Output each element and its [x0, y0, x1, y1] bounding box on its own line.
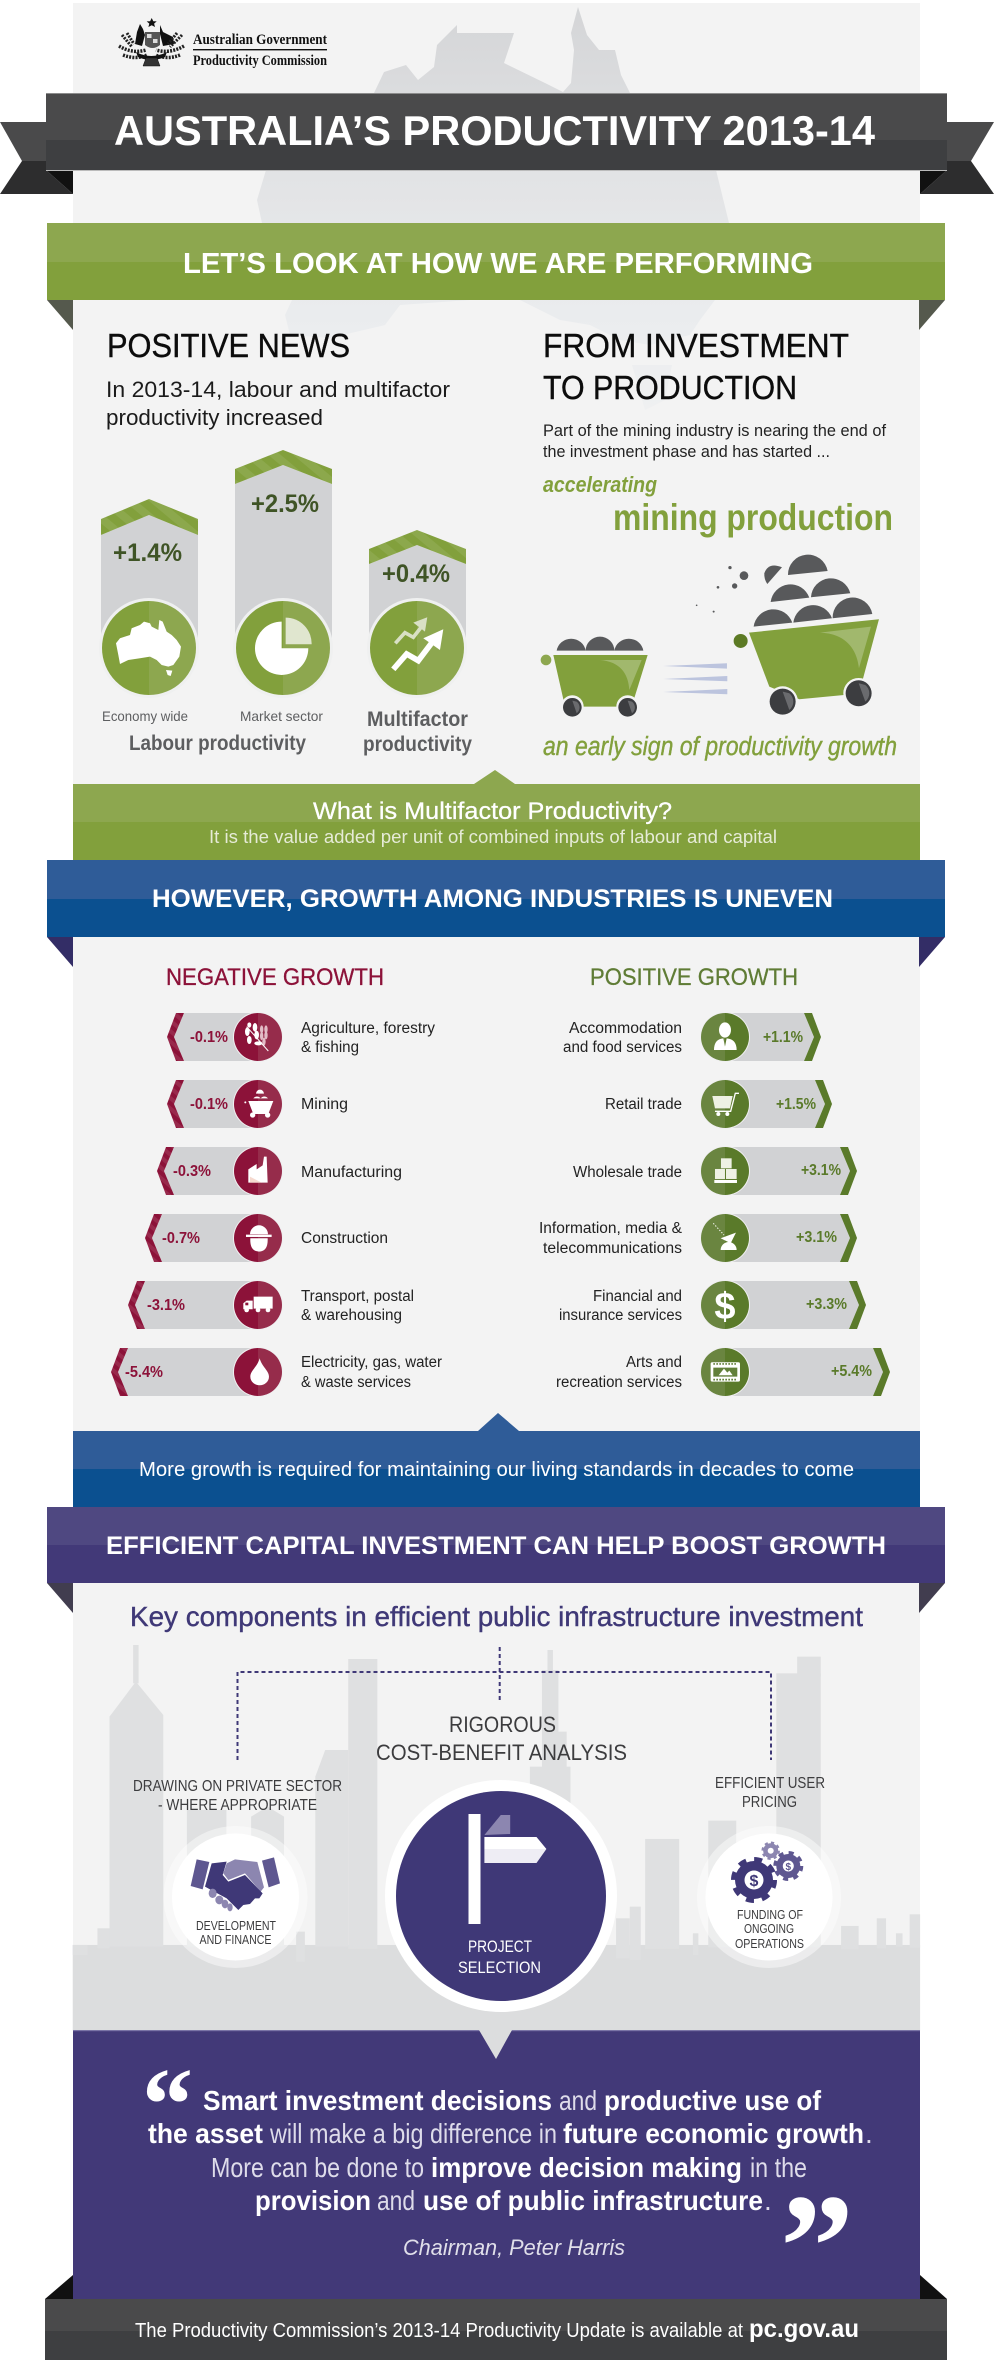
title ribbon: [0, 93, 994, 194]
panel: negative growth: [111, 964, 442, 1397]
icon: pie chart: [255, 618, 312, 675]
callout: more growth required: [73, 1413, 920, 1507]
row: retail: +1.5%: [776, 1096, 816, 1113]
circle: development and finance: DEVELOPMENT: [196, 1919, 276, 1933]
quote text: and: [559, 2085, 597, 2116]
row: construction: -0.7%: [162, 1230, 200, 1247]
early sign label: an early sign of productivity growth: [543, 733, 897, 761]
bar captions: Market sector: [240, 708, 323, 724]
quote text: Smart investment decisions: [203, 2085, 552, 2116]
panel: chairman quote: [73, 2030, 920, 2330]
text: drawing on private sector: - WHERE APPROPRIATE: [158, 1797, 317, 1814]
row: financial: +3.3%: [806, 1296, 847, 1313]
intro text: productivity increased: [106, 405, 323, 430]
text: drawing on private sector: DRAWING ON PRIVATE SECTOR: [133, 1778, 342, 1795]
icon: handshake: [191, 1857, 280, 1911]
row: agriculture: & fishing: [301, 1039, 359, 1056]
text: efficient user pricing: [715, 1775, 825, 1811]
callout: what is multifactor productivity: What is Multifactor Productivity?: [313, 798, 672, 825]
panel: from investment to production: [541, 327, 897, 761]
quote text: [148, 2085, 873, 2216]
quote text: the asset: [148, 2118, 263, 2149]
icon: shopping cart: [712, 1093, 739, 1116]
panel: positive news: [99, 327, 472, 756]
icon: dollar sign: $: [714, 1286, 736, 1328]
row: transport: -3.1%: [147, 1297, 185, 1314]
row: manufacturing: Manufacturing: [301, 1164, 402, 1181]
bar: multifactor +0.4%: +0.4%: [382, 560, 450, 588]
row: arts: recreation services: [556, 1374, 682, 1391]
icon: gears: [734, 1843, 801, 1900]
quote text: provision: [255, 2185, 371, 2216]
heading: from investment to production: TO PRODUCTION: [543, 369, 797, 406]
row: manufacturing: [157, 1146, 402, 1196]
heading: rigorous cost-benefit analysis: [376, 1712, 627, 1765]
row: transport: & warehousing: [301, 1307, 402, 1324]
bar captions: Labour productivity: [129, 732, 306, 755]
logo text: [193, 32, 328, 69]
row: financial: Financial and: [593, 1288, 682, 1305]
row: electricity: -5.4%: [125, 1364, 163, 1381]
quote text: productive use of: [604, 2085, 822, 2116]
footer ribbon: [45, 2275, 947, 2360]
bar: labour economy wide +1.4%: +1.4%: [113, 539, 182, 567]
icon: mining cart: [244, 1090, 273, 1118]
circle: project selection: PROJECT: [468, 1938, 532, 1956]
row: wholesale: +3.1%: [801, 1162, 841, 1179]
circle: development and finance: [164, 1826, 308, 1968]
icon: signpost: [468, 1814, 546, 1924]
quote text: use of public infrastructure: [423, 2185, 763, 2216]
row: information: telecommunications: [543, 1240, 682, 1257]
text: efficient user pricing: PRICING: [742, 1794, 797, 1811]
icon: closing quote mark: ”: [780, 2164, 854, 2330]
row: construction: [145, 1213, 388, 1263]
callout: what is multifactor productivity: It is the value added per unit of combined inputs of labour and capital: [209, 827, 777, 847]
row: wholesale: [573, 1146, 857, 1196]
section banner: uneven growth: [47, 860, 945, 967]
icon: coat of arms: [119, 18, 184, 66]
quote text: .: [865, 2118, 873, 2149]
row: transport: Transport, postal: [301, 1288, 414, 1305]
dashed connector lines: [238, 1647, 771, 1760]
banner heading: LET’S LOOK AT HOW WE ARE PERFORMING: [183, 248, 813, 280]
row: accommodation: +1.1%: [763, 1029, 803, 1046]
row: agriculture: Agriculture, forestry: [301, 1020, 435, 1037]
row: accommodation: and food services: [563, 1039, 682, 1056]
row: electricity: [111, 1347, 442, 1397]
heading: from investment to production: [543, 327, 849, 406]
bar captions: productivity: [363, 733, 472, 756]
row: agriculture: -0.1%: [190, 1029, 228, 1046]
quote text: future economic growth: [563, 2118, 864, 2149]
circle: funding of ongoing operations: [697, 1826, 841, 1968]
heading: rigorous cost-benefit analysis: COST-BENEFIT ANALYSIS: [376, 1740, 627, 1765]
investment text: [543, 422, 886, 461]
row: mining: [167, 1079, 348, 1129]
row: mining: -0.1%: [190, 1096, 228, 1113]
row: arts: [556, 1347, 890, 1397]
background skyline: [73, 1645, 920, 2031]
mining production label: mining production: [613, 497, 893, 538]
row: retail: [605, 1079, 832, 1129]
row: retail: Retail trade: [605, 1096, 682, 1113]
intro text: [106, 377, 450, 430]
accelerating label: accelerating: [543, 472, 657, 497]
footer link text: pc.gov.au: [749, 2315, 859, 2343]
row: information: [539, 1213, 857, 1263]
footer text: The Productivity Commission’s 2013-14 Productivity Update is available at: [135, 2320, 743, 2342]
section banner: performing: [47, 223, 945, 330]
row: transport: [128, 1280, 414, 1330]
large cart: [696, 555, 879, 717]
row: arts: Arts and: [626, 1354, 682, 1371]
quote attribution: Chairman, Peter Harris: [403, 2235, 625, 2260]
heading: from investment to production: FROM INVESTMENT: [543, 327, 849, 364]
quote text: in the: [750, 2152, 807, 2183]
bar: labour market sector +2.5%: +2.5%: [251, 490, 319, 518]
speed lines: [663, 663, 727, 694]
bar: multifactor +0.4%: [367, 530, 467, 698]
icon: factory: [248, 1157, 268, 1183]
circle: funding of ongoing operations: ONGOING: [744, 1922, 794, 1936]
investment text: Part of the mining industry is nearing the end of: [543, 422, 886, 440]
row: information: Information, media &: [539, 1220, 683, 1237]
bar: labour market sector +2.5%: [233, 450, 333, 698]
row: information: +3.1%: [796, 1229, 837, 1246]
circle: funding of ongoing operations: FUNDING OF: [737, 1908, 803, 1922]
investment text: the investment phase and has started ...: [543, 443, 830, 461]
icon: waiter: [714, 1022, 737, 1050]
ribbon tail left: [0, 122, 73, 194]
callout: more growth required: More growth is required for maintaining our living standards in decades to come: [139, 1459, 854, 1481]
panel: positive growth: [539, 964, 890, 1397]
row: arts: +5.4%: [831, 1363, 872, 1380]
intro text: In 2013-14, labour and multifactor: [106, 377, 450, 402]
quote text: and: [377, 2185, 415, 2216]
row: electricity: & waste services: [301, 1374, 411, 1391]
row: financial: [559, 1280, 866, 1330]
small cart: [541, 637, 648, 718]
ribbon tail right: [920, 122, 994, 194]
row: financial: insurance services: [559, 1307, 682, 1324]
quote text: will make a big difference in: [269, 2118, 557, 2149]
quote text: More can be done to: [211, 2152, 424, 2183]
row: wholesale: Wholesale trade: [573, 1164, 682, 1181]
icon: satellite dish: [713, 1223, 737, 1250]
heading: negative growth: NEGATIVE GROWTH: [166, 964, 384, 991]
icon: rising arrows: [393, 617, 443, 669]
bar captions: Economy wide: [102, 708, 188, 724]
banner heading: EFFICIENT CAPITAL INVESTMENT CAN HELP BOOST GROWTH: [106, 1532, 886, 1560]
logo: Australian Government Productivity Commission: [119, 18, 328, 69]
heading: positive news: POSITIVE NEWS: [107, 327, 350, 364]
icon: Australia map: [116, 620, 181, 676]
background map of Australia: [257, 7, 729, 410]
circle: project selection: SELECTION: [458, 1959, 541, 1977]
row: agriculture: [167, 1012, 435, 1062]
icon: gears: $: [750, 1873, 759, 1890]
icon: hard hat: [246, 1225, 272, 1252]
callout: what is multifactor productivity: [73, 770, 920, 860]
heading: rigorous cost-benefit analysis: RIGOROUS: [449, 1712, 556, 1737]
banner heading: HOWEVER, GROWTH AMONG INDUSTRIES IS UNEVEN: [152, 885, 833, 913]
icon: wheat: [245, 1022, 268, 1051]
logo text: Productivity Commission: [193, 53, 328, 69]
bar: labour economy wide +1.4%: [99, 499, 199, 698]
illustration: mining carts: [541, 555, 879, 718]
icon: opening quote mark: “: [142, 2047, 193, 2162]
row: electricity: Electricity, gas, water: [301, 1354, 442, 1371]
text: efficient user pricing: EFFICIENT USER: [715, 1775, 825, 1792]
circle: funding of ongoing operations: OPERATIONS: [735, 1937, 804, 1951]
logo text: Australian Government: [193, 32, 327, 48]
row: accommodation: [563, 1012, 821, 1062]
bar captions: Multifactor: [367, 708, 468, 731]
row: manufacturing: -0.3%: [173, 1163, 211, 1180]
icon: gears: $: [786, 1862, 792, 1873]
icon: boxes: [714, 1158, 737, 1183]
quote text: .: [764, 2185, 772, 2216]
icon: truck: [243, 1297, 273, 1312]
section banner: capital investment: [47, 1507, 945, 1613]
icon: film strip: [711, 1362, 740, 1382]
bar captions: [102, 708, 472, 756]
row: mining: Mining: [301, 1096, 348, 1113]
icon: water drop: [250, 1358, 269, 1385]
row: accommodation: Accommodation: [569, 1020, 682, 1037]
title: AUSTRALIA’S PRODUCTIVITY 2013-14: [114, 107, 876, 154]
circle: development and finance: AND FINANCE: [200, 1933, 272, 1947]
row: construction: Construction: [301, 1230, 388, 1247]
heading: positive growth: POSITIVE GROWTH: [590, 964, 798, 991]
heading: key components: Key components in efficient public infrastructure investment: [130, 1601, 863, 1632]
text: drawing on private sector: [133, 1778, 342, 1814]
quote text: improve decision making: [431, 2152, 742, 2183]
circle: project selection: [385, 1780, 617, 2012]
